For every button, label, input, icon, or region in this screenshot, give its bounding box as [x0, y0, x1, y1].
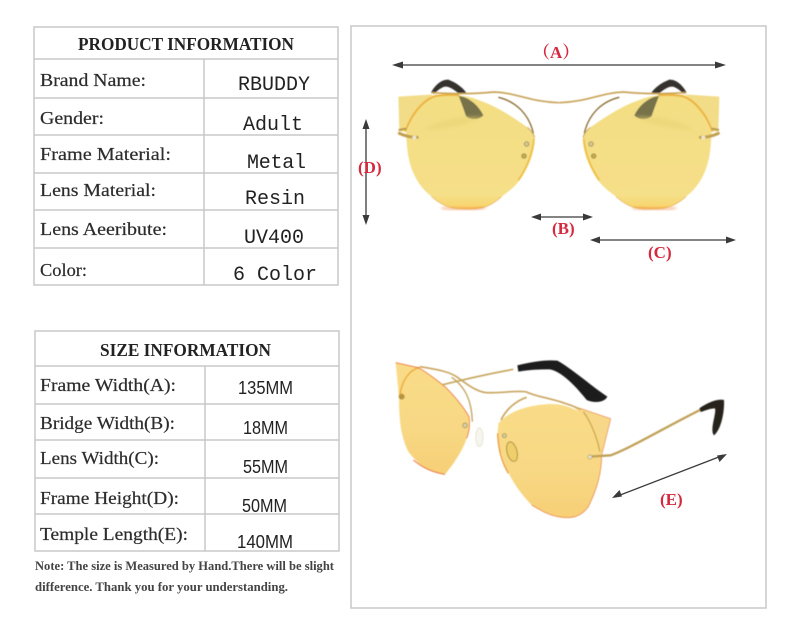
arrow: temple length E — [612, 454, 727, 498]
image: front view of sunglasses — [398, 80, 719, 210]
row: temple length: Temple Length(E): — [40, 524, 188, 545]
row: frame height: 50MM — [242, 496, 287, 516]
left half of glasses — [398, 80, 559, 210]
row: frame material — [40, 144, 306, 175]
row: lens attribute — [40, 219, 304, 250]
label: E: (E) — [660, 490, 683, 509]
row: lens material: Resin — [245, 188, 305, 211]
label: A: （A） — [533, 43, 579, 62]
row: lens material: Lens Material: — [40, 180, 156, 200]
row: bridge width: Bridge Width(B): — [40, 413, 175, 434]
panel: product information table — [34, 27, 338, 287]
text block: measurement note: Note: The size is Measured by Hand.There will be slight — [35, 559, 335, 573]
image: angled view of sunglasses — [396, 360, 724, 518]
row: temple length — [40, 524, 293, 552]
label: D: (D) — [358, 158, 382, 177]
row: lens width — [40, 448, 288, 477]
row: frame width — [40, 375, 293, 398]
arrow: frame height D — [362, 119, 370, 225]
row: brand name — [40, 70, 310, 97]
row: frame material: Frame Material: — [40, 144, 171, 164]
row: gender: Gender: — [40, 108, 104, 128]
row: lens material — [40, 180, 305, 211]
row: lens width: Lens Width(C): — [40, 448, 159, 469]
row: gender — [40, 108, 303, 137]
row: frame width: 135MM — [238, 378, 293, 398]
row: brand name: RBUDDY — [238, 74, 310, 97]
row: gender: Adult — [243, 114, 303, 137]
arrow: bridge width B — [531, 214, 593, 220]
row: frame width: Frame Width(A): — [40, 375, 176, 396]
row: frame height: Frame Height(D): — [40, 488, 179, 509]
panel: diagrams frame — [351, 26, 766, 608]
row: color: Color: — [40, 260, 87, 280]
arrow: lens width C — [590, 236, 736, 244]
row: brand name: Brand Name: — [40, 70, 146, 90]
row: color: 6 Color — [233, 264, 317, 287]
row: frame material: Metal — [247, 152, 306, 175]
row: color — [40, 260, 317, 287]
row: bridge width: 18MM — [243, 418, 288, 438]
text block: measurement note — [35, 559, 335, 594]
arrow: frame width A — [392, 62, 726, 68]
text block: measurement note: difference. Thank you for your understanding. — [35, 580, 288, 594]
row: frame height — [40, 488, 287, 516]
row: lens width: 55MM — [243, 457, 288, 477]
right half of glasses — [559, 80, 719, 210]
label: B: (B) — [552, 219, 575, 238]
row: temple length: 140MM — [237, 532, 293, 552]
heading: product information: PRODUCT INFORMATION — [78, 34, 294, 54]
row: lens attribute: Lens Aeeribute: — [40, 219, 167, 239]
label: C: (C) — [648, 243, 672, 262]
panel: size information table — [35, 331, 339, 552]
heading: size information: SIZE INFORMATION — [100, 340, 271, 360]
row: lens attribute: UV400 — [244, 227, 304, 250]
row: bridge width — [40, 413, 288, 438]
